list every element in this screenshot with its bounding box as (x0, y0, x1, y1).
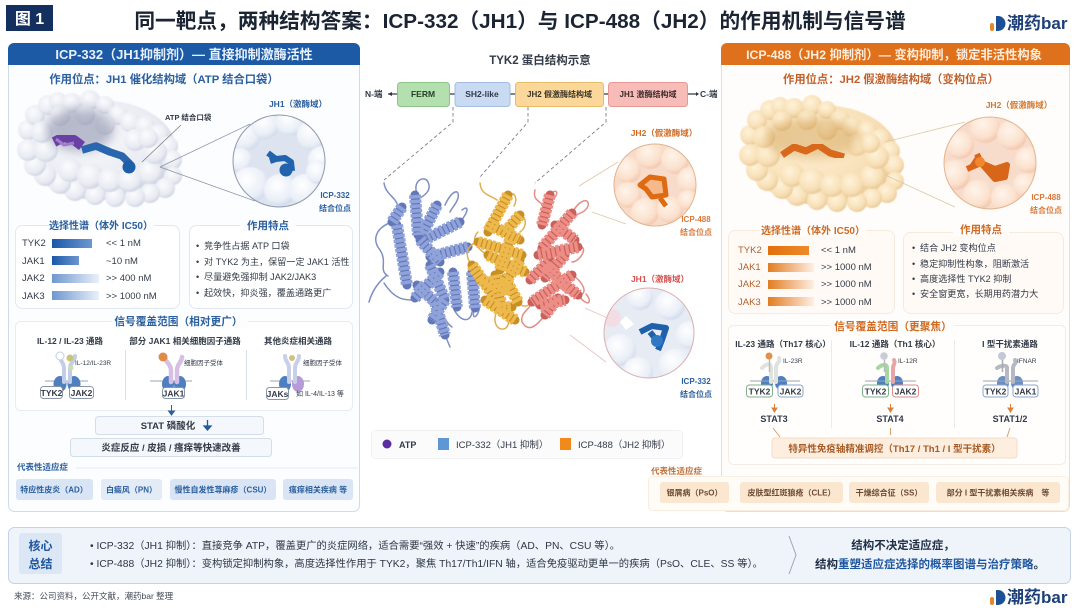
pathway 2: 部分 JAK1 相关细胞因子通路 (129, 336, 241, 346)
JH1: JH1 激酶结构域 (620, 89, 676, 99)
pathway 3: 其他炎症相关通路 (264, 336, 332, 346)
summary text: • ICP-488（JH2 抑制）：变构锁定抑制构象，高度选择性作用于 TYK2，聚焦 Th17/Th1/IFN 轴，适合免疫驱动更单一的疾病（PsO、CLE、SS 等）。 (90, 557, 763, 570)
pathway 3: 如 IL-4/IL-13 等 (296, 389, 344, 398)
pathway 3: TYK2 (985, 386, 1007, 396)
features box (904, 223, 1064, 314)
features list: 高度选择性 TYK2 抑制 (920, 273, 1011, 284)
indication chips: 慢性自发性荨麻疹（CSU） (175, 484, 271, 494)
summary tag: 核心 (28, 538, 53, 553)
callout lines: JH1 (570, 308, 612, 362)
pathway 2: STAT4 (876, 414, 904, 424)
features heading (953, 223, 1009, 236)
pathway 2: JAK1 (163, 388, 185, 398)
JH1 (608, 82, 688, 106)
STAT box (96, 416, 264, 434)
pathway 3: STAT1/2 (993, 414, 1027, 424)
features list: 稳定抑制性构象，阻断激活 (920, 258, 1029, 269)
features list: • (912, 289, 915, 299)
zoom circle: JH2 (944, 116, 1036, 210)
domain bar: C-端 (700, 89, 718, 99)
indication chips: 特应性皮炎（AD） (20, 484, 88, 494)
JH2: JH2 假激酶结构域 (527, 89, 592, 99)
label: ICP-332 site: ICP-332 (320, 191, 350, 200)
panel: ICP-332 (8, 43, 360, 512)
legend: ICP-488: ICP-488（JH2 抑制） (578, 439, 670, 451)
panel header: ICP-488（JH2 抑制剂）— 变构抑制，锁定非活性构象 (746, 47, 1042, 62)
legend (372, 430, 682, 458)
pathway 1: IL-23 通路（Th17 核心） (735, 339, 831, 349)
separators (832, 340, 954, 428)
zoom circle: JH2 (614, 141, 703, 226)
label: ICP-488 site: ICP-488 (681, 215, 711, 224)
pathway 1: JAK2 (71, 388, 93, 398)
STAT box: STAT 磷酸化 (141, 420, 196, 432)
features list: • (912, 243, 915, 253)
panel header (8, 43, 360, 65)
features list: • (912, 274, 915, 284)
logo: 潮药bar (1007, 14, 1068, 33)
title: 同一靶点，两种结构答案：ICP-332（JH1）与 ICP-488（JH2）的作用机制与信号谱 (134, 10, 906, 33)
pathway 3: I 型干扰素通路 (982, 339, 1038, 349)
features list: • (196, 288, 199, 298)
pathway 1: STAT3 (760, 414, 788, 424)
bars (22, 238, 157, 302)
features list: 对 TYK2 为主，保留一定 JAK1 活性 (204, 256, 350, 267)
separators (126, 350, 246, 400)
bars: >> 400 nM (106, 273, 152, 284)
bars: << 1 nM (106, 238, 141, 249)
features list: • (196, 257, 199, 267)
indications (648, 466, 1068, 510)
pathway 2: IL-12R (898, 358, 918, 365)
pathway 1: TYK2 (41, 388, 63, 398)
summary tag: 总结 (28, 556, 53, 571)
indication chips: 干燥综合征（SS） (856, 488, 922, 498)
figure tag: 图 1 (15, 11, 44, 28)
FERM: FERM (411, 89, 435, 99)
source: 来源：公司资料，公开文献，潮药bar 整理 (14, 591, 174, 601)
label: JH1: JH1（激酶域） (269, 99, 327, 109)
pathway 2: IL-12 通路（Th1 核心） (850, 339, 940, 349)
pathway 1: IL-12/IL-23R (75, 360, 111, 367)
bars: JAK2 (738, 279, 761, 290)
callout lines: JH2 (579, 162, 626, 224)
label: ICP-488 site: 结合位点 (680, 227, 712, 237)
bars: << 1 nM (821, 245, 856, 256)
bars: JAK1 (738, 262, 761, 273)
label: ICP-332 center site (680, 377, 712, 399)
FERM (398, 82, 450, 106)
pathway 2 (850, 339, 940, 424)
label: ATP pocket: ATP 结合口袋 (165, 112, 212, 122)
SH2-like (455, 82, 510, 106)
label: ICP-488 site: 结合位点 (1030, 205, 1062, 215)
indication chips (660, 482, 1060, 503)
features list (912, 242, 1038, 299)
pathway 1: JAK2 (780, 386, 802, 396)
coverage heading: 信号覆盖范围（相对更广） (114, 315, 243, 328)
features heading (240, 219, 296, 232)
figure tag (6, 5, 53, 31)
axis box: 特异性免疫轴精准调控（Th17 / Th1 / I 型干扰素） (788, 443, 1001, 455)
indication chips: 瘙痒相关疾病 等 (289, 484, 347, 494)
bars: JAK2 (22, 273, 45, 284)
features heading: 作用特点 (960, 223, 1002, 236)
callout lines (160, 124, 255, 201)
pathway 2: TYK2 (865, 386, 887, 396)
pathway 3: 细胞因子受体 (303, 358, 342, 367)
pathway 1 (37, 336, 111, 398)
dashed connectors (384, 107, 606, 183)
conclusion: 结构不决定适应症， (851, 538, 955, 552)
bars: >> 1000 nM (821, 262, 872, 273)
ribbon: JH2 (467, 183, 530, 329)
pathway 3 (982, 339, 1038, 424)
SH2-like: SH2-like (465, 89, 499, 99)
arrows to axis box (773, 428, 1010, 437)
coverage heading: 信号覆盖范围（更聚焦） (834, 320, 952, 333)
summary text (90, 539, 763, 570)
effect box (70, 438, 272, 456)
pathway 3: IFNAR (1017, 358, 1037, 365)
features list: 起效快，抑炎强，覆盖通路更广 (204, 287, 331, 298)
bars: JAK1 (22, 256, 45, 267)
bars: TYK2 (738, 245, 762, 256)
center heading: TYK2 蛋白结构示意 (489, 53, 591, 67)
site heading: 作用位点：JH2 假激酶结构域（变构位点） (783, 72, 999, 86)
features list: • (912, 259, 915, 269)
indication chips: 银屑病（PsO） (666, 488, 723, 498)
features list: • (196, 241, 199, 251)
indications (16, 462, 358, 500)
label: ICP-332 center site: ICP-332 (681, 377, 711, 386)
chevron (789, 536, 796, 574)
selectivity box (16, 219, 180, 308)
label: ATP pocket (142, 112, 212, 162)
pathway 1: TYK2 (749, 386, 771, 396)
indication chips: 白癜风（PN） (106, 484, 157, 494)
pathway 1 (735, 339, 831, 424)
indications: 代表性适应症 (651, 466, 703, 476)
zoom circle: JH1 center (604, 288, 694, 378)
arrow (168, 405, 174, 415)
callout lines (885, 122, 965, 207)
pathway 3: JAKs (267, 389, 289, 399)
conclusion (815, 538, 1045, 571)
features box (190, 219, 352, 308)
bars: >> 1000 nM (821, 279, 872, 290)
selectivity heading: 选择性谱（体外 IC50） (761, 224, 865, 237)
pathway 1: IL-12 / IL-23 通路 (37, 336, 104, 346)
pathway 3: JAK1 (1015, 386, 1037, 396)
label: ICP-488 site (1030, 193, 1062, 215)
selectivity box (728, 224, 894, 314)
features list: 尽量避免强抑制 JAK2/JAK3 (204, 271, 316, 282)
pathway 2: JAK2 (895, 386, 917, 396)
pathway 3 (264, 336, 344, 400)
features list (196, 240, 350, 298)
features list: 结合 JH2 变构位点 (920, 242, 996, 253)
features heading: 作用特点 (247, 219, 289, 232)
conclusion: 结构重塑适应症选择的概率图谱与治疗策略。 (815, 557, 1045, 571)
label: ICP-332 site: 结合位点 (319, 203, 351, 213)
bars (738, 245, 872, 308)
label: ICP-488 site: ICP-488 (1031, 193, 1061, 202)
ribbon: JH1 (522, 190, 589, 328)
label: ICP-488 site (680, 215, 712, 237)
footer logo: 潮药bar (1007, 588, 1068, 607)
indication chips: 皮肤型红斑狼疮（CLE） (748, 488, 836, 498)
signal coverage box (16, 314, 352, 410)
signal coverage box (728, 318, 1066, 464)
pathway 2: 细胞因子受体 (184, 358, 224, 367)
legend: ICP-332: ICP-332（JH1 抑制） (456, 439, 548, 451)
pathway 2 (129, 336, 241, 398)
bars: TYK2 (22, 238, 46, 249)
label: ICP-332 site (319, 191, 351, 213)
effect box: 炎症反应 / 皮损 / 瘙痒等快速改善 (101, 442, 241, 454)
label: JH2: JH2（假激酶域） (631, 128, 697, 138)
panel header (721, 43, 1070, 65)
zoom circle: JH1 (232, 114, 326, 208)
legend: ATP (382, 440, 416, 450)
label: JH1 center: JH1（激酶域） (631, 274, 689, 284)
site heading: 作用位点：JH1 催化结构域（ATP 结合口袋） (49, 72, 279, 86)
domain bar: N-端 (365, 89, 383, 99)
ribbon: FERM (369, 179, 480, 347)
legend: ATP: ATP (399, 440, 416, 450)
bars: >> 1000 nM (106, 291, 157, 302)
bars: JAK3 (22, 291, 45, 302)
JH2 (516, 82, 604, 106)
features list: 竞争性占据 ATP 口袋 (204, 240, 290, 251)
features list: 安全窗更宽，长期用药潜力大 (920, 288, 1038, 299)
bars: ~10 nM (106, 256, 138, 267)
bars: JAK3 (738, 297, 761, 308)
summary panel (8, 528, 1070, 584)
label: ICP-332 center site: 结合位点 (680, 389, 712, 399)
axis box (772, 438, 1017, 458)
summary text: • ICP-332（JH1 抑制）：直接竞争 ATP，覆盖更广的炎症网络，适合需要“强效 + 快速”的疾病（AD、PN、CSU 等）。 (90, 539, 620, 552)
bars: >> 1000 nM (821, 297, 872, 308)
domain bar (365, 82, 718, 106)
indications: 代表性适应症 (17, 462, 69, 472)
features list: • (196, 272, 199, 282)
pathway 1: IL-23R (783, 358, 803, 365)
indication chips: 部分 I 型干扰素相关疾病 等 (947, 488, 1049, 498)
selectivity heading: 选择性谱（体外 IC50） (49, 219, 153, 232)
protein surface with ligand (739, 95, 904, 212)
label: JH2: JH2（假激酶域） (986, 100, 1052, 110)
indication chips (16, 479, 353, 500)
summary tag (19, 533, 62, 574)
protein surface with ligand (17, 90, 182, 207)
panel header: ICP-332（JH1抑制剂）— 直接抑制激酶活性 (55, 47, 313, 62)
